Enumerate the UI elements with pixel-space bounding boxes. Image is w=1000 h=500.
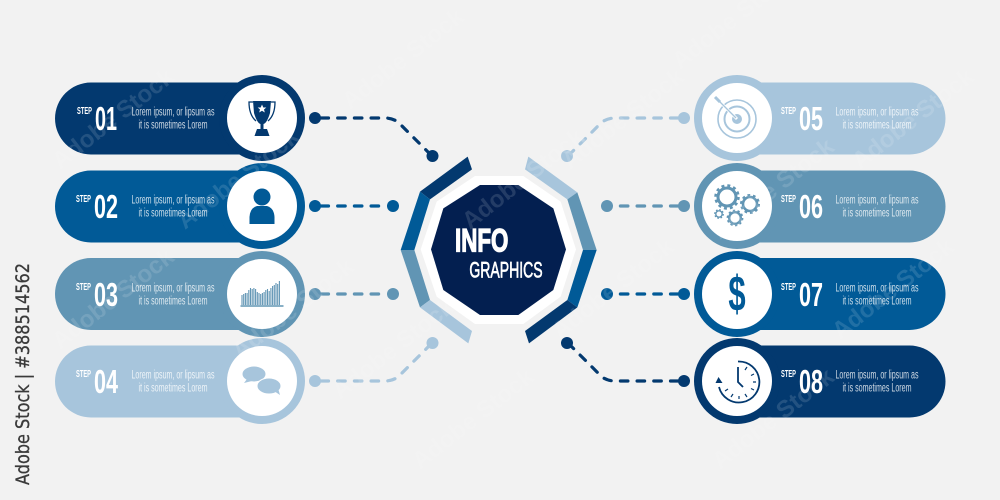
ring segment: bottom right (525, 300, 577, 343)
panel: step 07: STEP (781, 282, 796, 293)
ring segment: upper right (567, 192, 597, 250)
white decagon (421, 176, 576, 324)
watermarks: Adobe Stock (557, 63, 690, 175)
watermarks: Adobe Stock (327, 293, 460, 405)
panel: step 01: STEP (77, 106, 92, 117)
panel: step 03 (55, 251, 305, 337)
panel: step 01 (55, 75, 305, 161)
panel: step 06: Lorem ipsum, or lipsum as (836, 194, 919, 206)
panel: step 04 (55, 338, 305, 424)
icon: clock (716, 361, 759, 402)
icon: target (715, 97, 756, 138)
watermarks: Adobe Stock (47, 243, 180, 355)
panel: step 05: 05 (799, 100, 823, 137)
panel: step 08: 08 (799, 363, 823, 400)
watermarks: Adobe Stock (827, 233, 960, 345)
ring segment: bottom left (420, 300, 472, 343)
panel: step 07 (694, 251, 946, 337)
title: INFO GRAPHICS (455, 223, 543, 282)
connector: step 08 (561, 337, 690, 387)
connector: step 01 (309, 112, 438, 162)
panel: step 02: 02 (94, 188, 118, 225)
connector: step 02 (309, 200, 399, 212)
watermarks: Adobe Stock (172, 123, 305, 235)
panel: step 02: it is sometimes Lorem (138, 208, 208, 220)
ring segment: upper left (401, 192, 430, 250)
icon: person (250, 188, 274, 224)
panel: step 05 (694, 75, 945, 161)
panel: step 07: 07 (799, 276, 823, 313)
panel: step 04: it is sometimes Lorem (138, 382, 208, 394)
connector: step 07 (601, 288, 690, 300)
watermarks: Adobe Stock (457, 123, 590, 235)
icon: bar chart (240, 281, 284, 306)
panel: step 07: it is sometimes Lorem (842, 296, 912, 308)
icon: dollar sign: $ (728, 265, 746, 322)
panel: step 03: 03 (94, 276, 118, 313)
title: INFO GRAPHICS: GRAPHICS (469, 257, 543, 282)
panel: step 03: Lorem ipsum, or lipsum as (132, 282, 215, 294)
watermarks: Adobe Stock (47, 63, 180, 175)
watermarks: Adobe Stock (707, 363, 840, 475)
panel: step 06: it is sometimes Lorem (842, 208, 912, 220)
connector: step 04 (309, 337, 438, 387)
panel: step 01: 01 (95, 100, 117, 137)
panel: step 04: Lorem ipsum, or lipsum as (132, 370, 215, 382)
panel: step 08: STEP (781, 369, 796, 380)
watermarks: Adobe Stock (227, 253, 360, 365)
icon: gears (715, 186, 759, 226)
panel: step 02 (55, 163, 305, 249)
vertical stock id text: Adobe Stock | #388514562 (12, 263, 34, 485)
ring segment: top left (420, 157, 472, 199)
watermarks: Adobe Stock (847, 63, 980, 175)
connector: step 03 (309, 288, 399, 300)
panel: step 03: STEP (76, 282, 91, 293)
panel: step 07: Lorem ipsum, or lipsum as (836, 282, 919, 294)
panel: step 05: Lorem ipsum, or lipsum as (836, 106, 919, 118)
panel: step 05: it is sometimes Lorem (842, 120, 912, 132)
ring segment: lower right (567, 250, 597, 307)
panel: step 04: 04 (94, 363, 118, 400)
central octagon badge (401, 157, 597, 343)
panel: step 04: STEP (76, 369, 91, 380)
dark decagon (431, 185, 566, 315)
watermarks: Adobe Stock (707, 133, 840, 245)
panel: step 06: 06 (799, 188, 823, 225)
watermarks: Adobe Stock (547, 233, 680, 345)
panel: step 08 (694, 338, 946, 424)
title: INFO GRAPHICS: INFO (455, 223, 508, 259)
panel: step 08: Lorem ipsum, or lipsum as (836, 370, 919, 382)
panel: step 06: STEP (781, 194, 796, 205)
panel: step 01: it is sometimes Lorem (138, 120, 208, 132)
panel: step 02: Lorem ipsum, or lipsum as (132, 194, 215, 206)
icon: speech bubbles (242, 366, 281, 395)
connector: step 05 (561, 112, 690, 162)
panel: step 03: it is sometimes Lorem (138, 296, 208, 308)
panel: step 05: STEP (781, 106, 796, 117)
panel: step 08: it is sometimes Lorem (842, 382, 912, 394)
ring segment: lower left (401, 250, 430, 307)
watermarks: Adobe Stock (337, 3, 470, 115)
panel: step 01: Lorem ipsum, or lipsum as (132, 106, 215, 118)
icon: trophy (249, 101, 275, 136)
watermarks: Adobe Stock (407, 363, 540, 475)
connector: step 06 (601, 200, 690, 212)
ring segment: top right (525, 157, 577, 199)
panel: step 06 (694, 163, 946, 249)
panel: step 02: STEP (76, 194, 91, 205)
